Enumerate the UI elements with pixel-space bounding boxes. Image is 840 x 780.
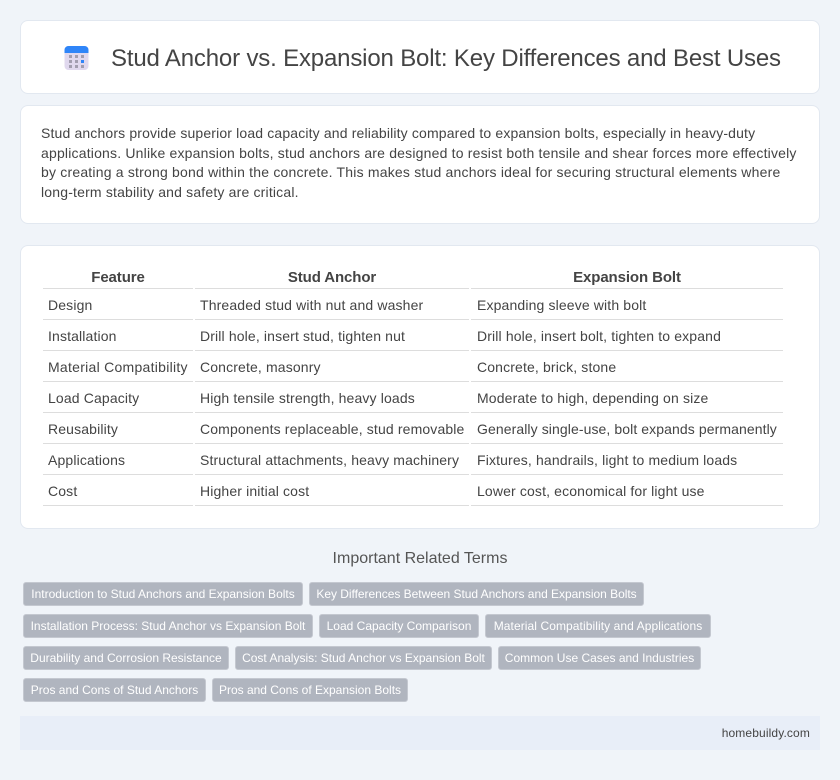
table header row: Feature bbox=[91, 269, 145, 286]
header panel bbox=[20, 20, 820, 94]
row: Material Compatibility bbox=[48, 359, 616, 375]
row: Applications: Applications bbox=[48, 452, 125, 468]
row: Installation: Drill hole, insert stud, tighten nut bbox=[200, 328, 405, 344]
row: Design: Design bbox=[48, 297, 92, 313]
intro paragraph: applications. Unlike expansion bolts, stud anchors are designed to resist both tensile and shear forces more effectively bbox=[41, 145, 797, 161]
intro paragraph: by creating a strong bond within the concrete. This makes stud anchors ideal for securing structural elements where bbox=[41, 164, 780, 180]
row: Cost bbox=[48, 483, 705, 499]
row: Load Capacity bbox=[48, 390, 708, 406]
row: Load Capacity: High tensile strength, heavy loads bbox=[200, 390, 415, 406]
row: Design bbox=[48, 297, 646, 313]
row: Reusability: Components replaceable, stud removable bbox=[200, 421, 464, 437]
row: Installation: Installation bbox=[48, 328, 117, 344]
row: Cost: Cost bbox=[48, 483, 77, 499]
row: Reusability bbox=[48, 421, 777, 437]
title: Stud Anchor vs. Expansion Bolt: Key Differences and Best Uses bbox=[111, 45, 781, 72]
related term tags: Common Use Cases and Industries bbox=[505, 651, 694, 665]
row: Load Capacity: Moderate to high, depending on size bbox=[477, 390, 708, 406]
row: Design: Threaded stud with nut and washer bbox=[200, 297, 423, 313]
row: Design: Expanding sleeve with bolt bbox=[477, 297, 646, 313]
table header row bbox=[91, 269, 681, 286]
footer source text: homebuildy.com bbox=[722, 726, 810, 740]
row: Reusability: Generally single-use, bolt expands permanently bbox=[477, 421, 777, 437]
row: Applications: Structural attachments, heavy machinery bbox=[200, 452, 459, 468]
icon: calendar bbox=[64, 46, 88, 70]
panel: comparison table bbox=[20, 245, 820, 529]
row: Material Compatibility: Material Compatibility bbox=[48, 359, 188, 375]
related term tags: Key Differences Between Stud Anchors and Expansion Bolts bbox=[316, 587, 637, 601]
row: Cost: Higher initial cost bbox=[200, 483, 309, 499]
intro paragraph: long-term stability and safety are critical. bbox=[41, 184, 299, 200]
related term tags: Introduction to Stud Anchors and Expansion Bolts bbox=[31, 587, 295, 601]
related term tags: Pros and Cons of Expansion Bolts bbox=[219, 683, 401, 697]
row: Applications: Fixtures, handrails, light to medium loads bbox=[477, 452, 737, 468]
related term tags: Load Capacity Comparison bbox=[327, 619, 471, 633]
related term tags: Installation Process: Stud Anchor vs Expansion Bolt bbox=[31, 619, 305, 633]
table header row: Expansion Bolt bbox=[573, 269, 681, 286]
row: Material Compatibility: Concrete, masonry bbox=[200, 359, 321, 375]
related term tags: Durability and Corrosion Resistance bbox=[30, 651, 222, 665]
row: Installation: Drill hole, insert bolt, tighten to expand bbox=[477, 328, 721, 344]
related term tags: Pros and Cons of Stud Anchors bbox=[31, 683, 198, 697]
heading: related terms: Important Related Terms bbox=[333, 550, 507, 567]
table header row: Stud Anchor bbox=[288, 269, 376, 286]
related term tags: Material Compatibility and Applications bbox=[494, 619, 702, 633]
row: Reusability: Reusability bbox=[48, 421, 118, 437]
row: Cost: Lower cost, economical for light use bbox=[477, 483, 705, 499]
row: Applications bbox=[48, 452, 737, 468]
row: Material Compatibility: Concrete, brick, stone bbox=[477, 359, 616, 375]
related term tags: Cost Analysis: Stud Anchor vs Expansion Bolt bbox=[242, 651, 485, 665]
intro paragraph bbox=[41, 125, 797, 200]
footer bbox=[20, 716, 820, 750]
row: Installation bbox=[48, 328, 721, 344]
row: Load Capacity: Load Capacity bbox=[48, 390, 139, 406]
related term tags bbox=[23, 582, 711, 702]
panel: intro text bbox=[20, 105, 820, 224]
intro paragraph: Stud anchors provide superior load capacity and reliability compared to expansion bolts, especially in heavy-duty bbox=[41, 125, 755, 141]
